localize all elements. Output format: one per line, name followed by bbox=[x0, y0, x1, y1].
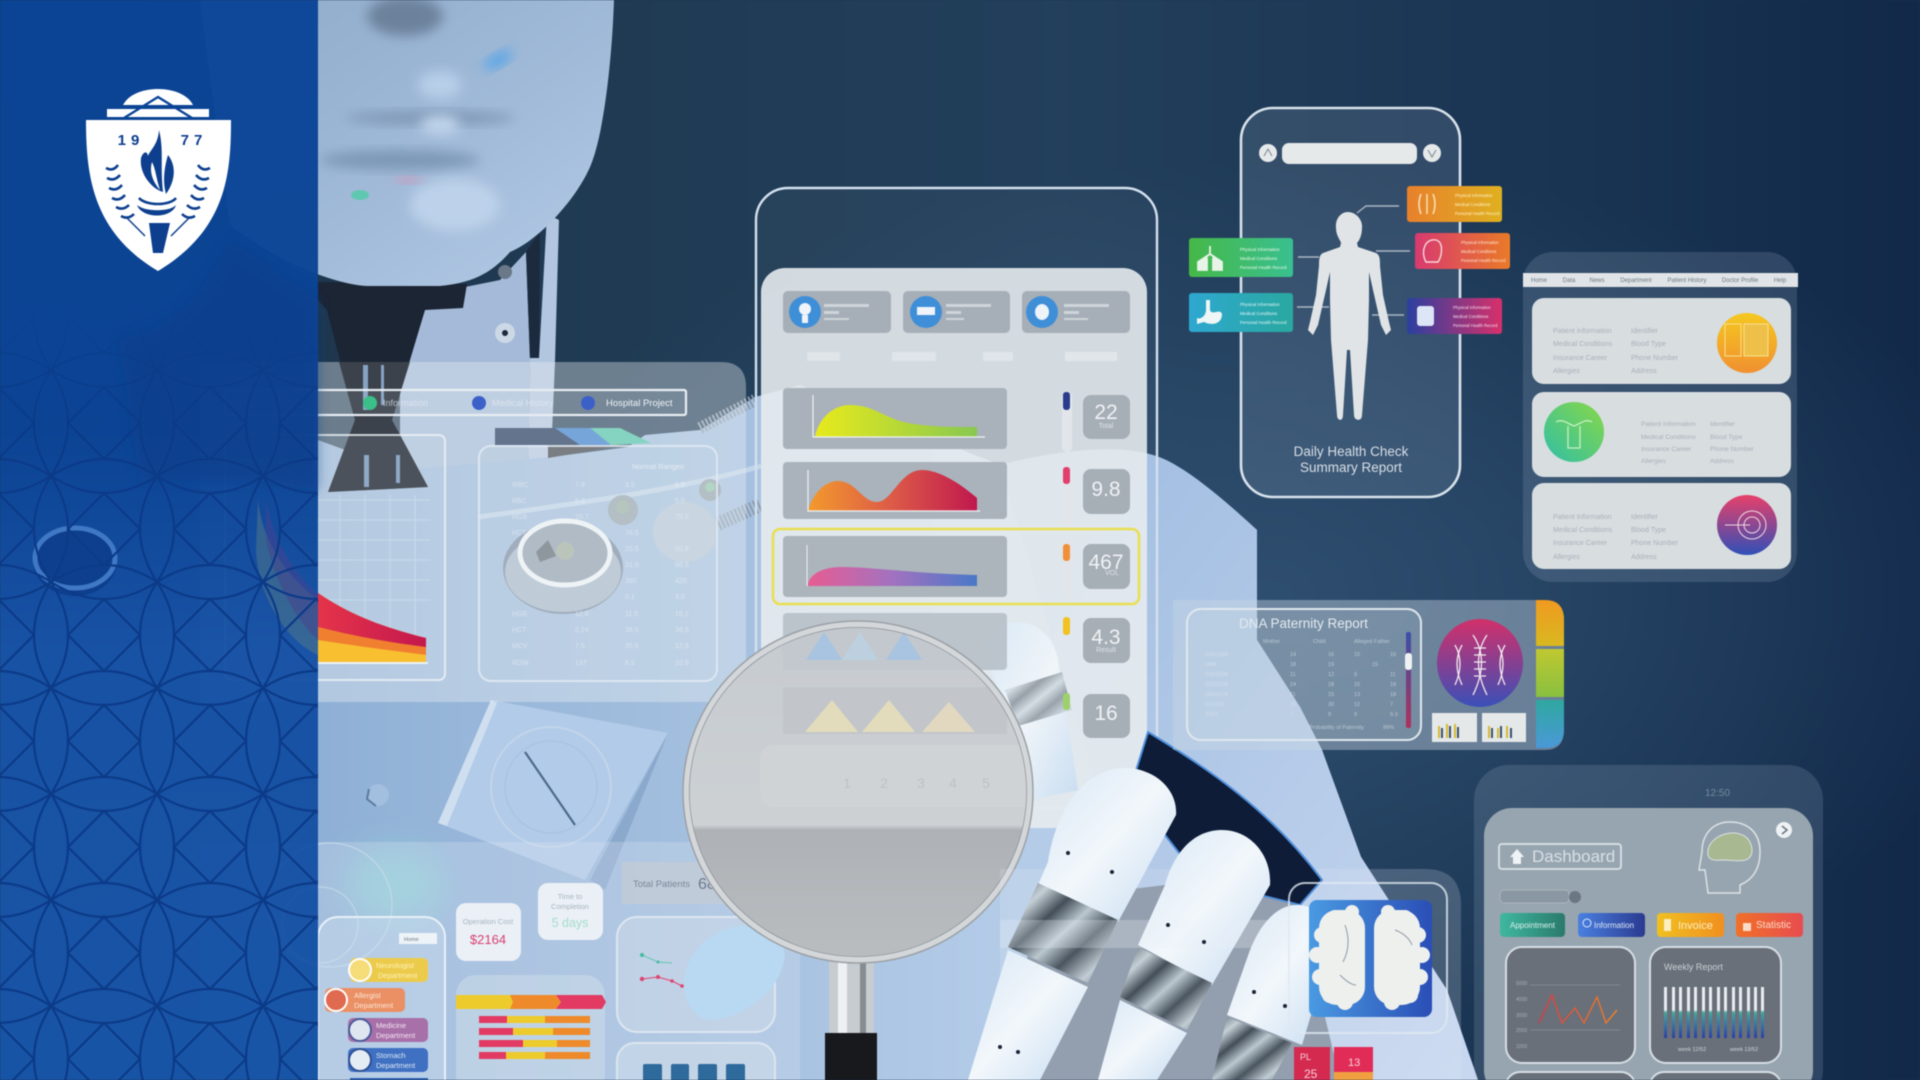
line chart bbox=[1506, 947, 1635, 1063]
report frame: 99% bbox=[1383, 725, 1394, 731]
weekly report chart: week 12/52 bbox=[1677, 1047, 1706, 1053]
table panel: HGB bbox=[512, 514, 528, 521]
tag: stomach bbox=[1189, 293, 1293, 332]
table panel: 7.9 bbox=[575, 482, 585, 489]
report frame: DNA Paternity Report bbox=[1239, 616, 1368, 631]
table panel: 36.5 bbox=[625, 627, 639, 634]
report frame: Child bbox=[1313, 639, 1326, 645]
dashboard card bbox=[1484, 808, 1813, 1080]
table panel: 5.5 bbox=[675, 498, 685, 505]
brain lobes bbox=[1309, 905, 1430, 1010]
blue overlay bbox=[0, 0, 318, 1080]
magnifier ring bbox=[683, 621, 1033, 963]
geometric pattern bbox=[0, 394, 318, 1080]
tag: spine: Physical Information bbox=[1455, 193, 1493, 198]
faint ring bbox=[268, 843, 392, 967]
line chart: 4000 bbox=[1516, 997, 1527, 1003]
record card 2: Medical Conditions bbox=[1641, 434, 1697, 441]
tag: intestine: Physical Information bbox=[1453, 305, 1491, 310]
red tiles bbox=[1294, 1047, 1373, 1080]
navigation bar: Home bbox=[1531, 278, 1548, 284]
record card 2 bbox=[1532, 392, 1791, 477]
neck seen through panel bbox=[328, 362, 428, 492]
chart row 1 bbox=[783, 388, 1007, 449]
logo year: 77 bbox=[181, 132, 207, 149]
color strip bbox=[1536, 600, 1564, 748]
gantt chart bbox=[456, 975, 606, 1080]
weekly report chart bbox=[1650, 947, 1781, 1063]
table panel: 3.5 bbox=[625, 482, 635, 489]
tab bar: Information bbox=[383, 398, 428, 408]
record card 2: Blood Type bbox=[1710, 434, 1743, 441]
tab bar: Medical History bbox=[492, 398, 554, 408]
record card 1: Patient Information bbox=[1553, 328, 1612, 335]
report frame: 15 bbox=[1354, 682, 1360, 688]
department phone bbox=[318, 917, 445, 1080]
tag: stomach: Personal Health Record bbox=[1240, 320, 1287, 325]
report frame: 16 bbox=[1390, 652, 1396, 658]
record card 3: Medical Conditions bbox=[1553, 527, 1613, 534]
area behind fingers bbox=[1000, 870, 1340, 1080]
department phone: Medicine bbox=[376, 1021, 406, 1030]
table panel: 3.0 bbox=[675, 594, 685, 601]
report frame: 15 bbox=[1328, 692, 1334, 698]
report frame: 9 bbox=[1354, 712, 1357, 718]
report frame: 29 bbox=[1290, 702, 1296, 708]
report frame: 7 bbox=[1290, 712, 1293, 718]
report frame: 11 bbox=[1390, 672, 1396, 678]
robot shoulder bbox=[1000, 449, 1478, 1080]
logo torch bbox=[137, 130, 176, 253]
panel: brain scan bbox=[1289, 883, 1447, 1080]
mini bar tiles bbox=[1432, 713, 1526, 742]
line chart: 2000 bbox=[1516, 1028, 1527, 1034]
department phone: Department bbox=[378, 971, 418, 980]
brain head icon bbox=[1699, 822, 1792, 893]
navigation bar: Doctor Profile bbox=[1722, 278, 1759, 284]
report frame: 12 bbox=[1328, 672, 1334, 678]
report frame: 14 bbox=[1290, 652, 1296, 658]
panel: patient records bbox=[1523, 252, 1798, 582]
report frame: Mother bbox=[1263, 639, 1280, 645]
report frame: 30 bbox=[1328, 702, 1334, 708]
logo year bbox=[118, 132, 207, 149]
record card 3: Address bbox=[1631, 554, 1657, 561]
navigation bar: Help bbox=[1774, 278, 1787, 284]
operation cost card bbox=[456, 903, 521, 961]
department phone: Home bbox=[404, 937, 419, 943]
record card 1: Phone Number bbox=[1631, 355, 1679, 362]
teal glow bbox=[345, 847, 445, 923]
table panel: HGB bbox=[512, 611, 528, 618]
report frame: Probability of Paternity bbox=[1309, 725, 1364, 731]
table panel: HCT bbox=[512, 530, 527, 537]
value readouts: VOL bbox=[1105, 570, 1119, 577]
record card 3: Insurance Career bbox=[1553, 540, 1608, 547]
report frame: 11 bbox=[1290, 672, 1296, 678]
icon button panel bbox=[617, 1043, 775, 1080]
report frame: 12 bbox=[1354, 702, 1360, 708]
navigation bar bbox=[1523, 273, 1798, 287]
left blue panel bbox=[0, 0, 318, 1080]
logo year: 19 bbox=[118, 132, 144, 149]
report frame: 18 bbox=[1390, 682, 1396, 688]
report frame: 16 bbox=[1328, 652, 1334, 658]
value readouts: 4.3 bbox=[1091, 626, 1121, 649]
table panel: 58.5 bbox=[675, 562, 689, 569]
status bar: 12:50 bbox=[1705, 788, 1730, 799]
table panel: HCT bbox=[512, 627, 527, 634]
table panel: 0.1 bbox=[625, 594, 635, 601]
finger 1 bbox=[968, 768, 1176, 1080]
panel: lower-left department app bbox=[200, 842, 800, 1080]
report frame: Alleged Father bbox=[1354, 639, 1390, 645]
robot neck bbox=[318, 282, 467, 492]
value readouts: 9.8 bbox=[1091, 478, 1121, 501]
value readouts: 22 bbox=[1094, 401, 1118, 424]
table panel: 0.24 bbox=[575, 627, 589, 634]
logo shield bbox=[86, 120, 231, 271]
table panel: 7.5 bbox=[575, 643, 585, 650]
magnifying glass bbox=[682, 620, 1034, 1080]
navigation bar: Department bbox=[1620, 278, 1652, 284]
finger 2 bbox=[1098, 830, 1270, 1080]
time to completion card: Completion bbox=[551, 902, 589, 911]
tag: head: Physical Information bbox=[1461, 240, 1499, 245]
value readouts: Result bbox=[1096, 647, 1116, 654]
line chart: 5000 bbox=[1516, 981, 1527, 987]
table panel: 137 bbox=[575, 660, 587, 667]
report frame: 15 bbox=[1354, 652, 1360, 658]
record card 2: Patient Information bbox=[1641, 421, 1696, 428]
neck colored tabs bbox=[495, 428, 651, 458]
panel: dashboard bbox=[1474, 765, 1823, 1080]
robot bbox=[200, 0, 1478, 1080]
record card 2: Phone Number bbox=[1710, 446, 1755, 453]
human body silhouette bbox=[1308, 212, 1391, 420]
tag: stomach: Physical Information bbox=[1240, 302, 1280, 307]
table panel: RBC bbox=[512, 498, 527, 505]
line chart: 3000 bbox=[1516, 1013, 1527, 1019]
record card 3: Phone Number bbox=[1631, 540, 1679, 547]
lens contents: 5 bbox=[982, 775, 990, 791]
robot neck plate bbox=[400, 214, 559, 480]
report frame: 18 bbox=[1390, 692, 1396, 698]
record card 2: Address bbox=[1710, 458, 1735, 465]
table panel: 420 bbox=[675, 578, 687, 585]
record card 3: Patient Information bbox=[1553, 514, 1612, 521]
panel: DNA paternity report bbox=[1173, 600, 1564, 750]
chart row 2 bbox=[783, 462, 1007, 519]
logo bbox=[86, 89, 231, 271]
logo laurels bbox=[106, 165, 210, 236]
table panel: WBC bbox=[512, 482, 528, 489]
record card 3 bbox=[1532, 483, 1791, 569]
table panel: 76.5 bbox=[625, 530, 639, 537]
operation cost card: Operation Cost bbox=[463, 917, 514, 926]
record card 3: Identifier bbox=[1631, 514, 1659, 521]
panel: vital signs phone bbox=[683, 188, 1160, 1080]
tag: head: Medical Conditions bbox=[1461, 249, 1496, 254]
category buttons: Appointment bbox=[1510, 921, 1556, 930]
red tiles: 13 bbox=[1348, 1057, 1360, 1069]
record card 1 bbox=[1532, 298, 1791, 384]
phone outline bbox=[1241, 108, 1460, 497]
highlight frame bbox=[773, 529, 1139, 604]
chart row 3 bbox=[783, 536, 1007, 597]
report frame: D2S1338 bbox=[1205, 682, 1228, 688]
report title: Summary Report bbox=[1300, 460, 1402, 475]
record card 1: Medical Conditions bbox=[1553, 341, 1613, 348]
total patients: Total Patients bbox=[633, 879, 690, 890]
department phone: Department bbox=[376, 1031, 416, 1040]
overlay ghost gear bbox=[33, 528, 117, 596]
value readouts: 16 bbox=[1094, 702, 1118, 725]
dashboard button: Dashboard bbox=[1532, 847, 1615, 866]
report frame: 18 bbox=[1328, 682, 1334, 688]
record card 2: Insurance Career bbox=[1641, 446, 1692, 453]
total patients bbox=[622, 862, 772, 904]
report frame: 7 bbox=[1390, 702, 1393, 708]
table panel: 12.9 bbox=[675, 643, 689, 650]
translucent strip bbox=[1000, 920, 1290, 948]
magnifier lens bbox=[688, 626, 1028, 958]
record card 1: Allergies bbox=[1553, 368, 1580, 375]
time to completion card bbox=[538, 883, 603, 940]
lens contents bbox=[804, 632, 989, 788]
panel: daily health check phone bbox=[1189, 108, 1510, 497]
connector lines bbox=[1297, 206, 1410, 315]
dark arm band bbox=[1130, 732, 1322, 905]
report title bbox=[1294, 444, 1409, 475]
weekly report chart: Weekly Report bbox=[1664, 962, 1723, 972]
record card 1: Identifier bbox=[1631, 328, 1659, 335]
tag: spine bbox=[1407, 186, 1502, 222]
tag: stomach: Medical Conditions bbox=[1240, 311, 1278, 316]
search field bbox=[1500, 890, 1581, 903]
tag: intestine bbox=[1407, 298, 1502, 334]
navigation bar: News bbox=[1589, 278, 1605, 284]
weekly report chart: week 13/52 bbox=[1729, 1047, 1758, 1053]
report frame: 18 bbox=[1290, 662, 1296, 668]
department phone: Department bbox=[376, 1061, 416, 1070]
table panel: 35.5 bbox=[625, 643, 639, 650]
chart row 4 bbox=[783, 613, 1007, 670]
top info cards bbox=[783, 291, 1130, 333]
robot thumb bbox=[684, 925, 785, 1020]
tag: spine: Personal Health Record bbox=[1455, 211, 1500, 216]
lower dashboard cards bbox=[1506, 1072, 1781, 1080]
dashboard button bbox=[1499, 844, 1621, 869]
value readouts: 467 bbox=[1088, 551, 1124, 574]
tag: lungs: Medical Conditions bbox=[1240, 256, 1278, 261]
inner card bbox=[761, 268, 1147, 828]
record card 2: Allergies bbox=[1641, 458, 1667, 465]
table panel: 6.5 bbox=[625, 660, 635, 667]
lens contents: 2 bbox=[880, 775, 888, 791]
tag: lungs: Physical Information bbox=[1240, 247, 1280, 252]
panel: brain scan backing bbox=[1000, 869, 1461, 1080]
report title: Daily Health Check bbox=[1294, 444, 1409, 459]
total patients: 6803 bbox=[698, 876, 734, 893]
report frame bbox=[1187, 609, 1421, 740]
tag: intestine: Personal Health Record bbox=[1453, 323, 1498, 328]
record card 2: Identifier bbox=[1710, 421, 1736, 428]
table panel: MCV bbox=[512, 643, 528, 650]
table panel: 9.5 bbox=[675, 482, 685, 489]
magnifier handle bbox=[825, 958, 877, 1080]
body curved highlight bbox=[478, 466, 761, 517]
overlay ghost rainbow chart bbox=[256, 500, 318, 655]
time to completion card: 5 days bbox=[552, 916, 588, 930]
tag: head bbox=[1415, 233, 1510, 269]
tag: intestine: Medical Conditions bbox=[1453, 314, 1488, 319]
report frame: 24 bbox=[1290, 682, 1296, 688]
tag: lungs bbox=[1189, 238, 1293, 277]
report frame: TH01 bbox=[1205, 712, 1218, 718]
category buttons: Invoice bbox=[1678, 920, 1713, 932]
table panel: Normal Ranges bbox=[632, 462, 684, 471]
table panel: 31.9 bbox=[625, 562, 639, 569]
chart panel: rainbow area bbox=[225, 435, 445, 680]
report frame: 15 bbox=[1372, 662, 1378, 668]
table panel: 50.9 bbox=[675, 546, 689, 553]
logo dome bbox=[123, 89, 193, 105]
robot finger behind panel bbox=[985, 622, 1078, 800]
scatter chart panel bbox=[617, 917, 775, 1032]
report frame: D16S539 bbox=[1205, 672, 1228, 678]
lens contents: 3 bbox=[917, 775, 925, 791]
report frame: 13 bbox=[1354, 692, 1360, 698]
navigation bar: Patient History bbox=[1667, 278, 1707, 284]
phone outline bbox=[756, 188, 1157, 808]
category buttons: Information bbox=[1594, 921, 1634, 930]
table panel: RDW bbox=[512, 660, 529, 667]
record card 3: Allergies bbox=[1553, 554, 1580, 561]
red tiles: PL bbox=[1300, 1052, 1311, 1062]
value readouts: Total bbox=[1099, 423, 1114, 430]
table panel: 11.5 bbox=[625, 611, 638, 618]
report frame: 19 bbox=[1328, 662, 1334, 668]
overlay ghost shadow bbox=[120, 240, 318, 490]
department phone: Neurologist bbox=[376, 961, 415, 970]
record card 1: Insurance Career bbox=[1553, 355, 1608, 362]
table panel: 25.5 bbox=[625, 546, 639, 553]
finger 3 bbox=[1212, 905, 1333, 1080]
mechanical gear bbox=[503, 400, 760, 614]
report frame: 11 bbox=[1290, 692, 1296, 698]
category buttons bbox=[1500, 913, 1803, 937]
report frame: vWA bbox=[1205, 662, 1217, 668]
report frame: 9 bbox=[1328, 712, 1331, 718]
lens contents: 4 bbox=[949, 775, 957, 791]
DNA icon bbox=[1437, 619, 1523, 707]
robot body bbox=[318, 385, 1478, 1080]
table panel: 16.1 bbox=[675, 611, 689, 618]
record card 1: Address bbox=[1631, 368, 1657, 375]
robot hand bbox=[968, 732, 1340, 1080]
tag: lungs: Personal Health Record bbox=[1240, 265, 1287, 270]
table panel: 75.5 bbox=[675, 514, 689, 521]
record card 3: Blood Type bbox=[1631, 527, 1666, 534]
report frame: 9 bbox=[1354, 672, 1357, 678]
department phone: Allergist bbox=[354, 991, 382, 1000]
tab bar bbox=[225, 390, 686, 415]
panel: translucent tab panel bbox=[200, 362, 746, 702]
table panel: 34.9 bbox=[675, 627, 689, 634]
value readouts bbox=[1062, 392, 1130, 738]
table panel: 12.8 bbox=[575, 611, 589, 618]
robot face bbox=[200, 0, 614, 286]
tag: head: Personal Health Record bbox=[1461, 258, 1506, 263]
table panel bbox=[479, 446, 717, 681]
tab bar: Hospital Project bbox=[606, 398, 673, 409]
table panel: 10.5 bbox=[675, 660, 689, 667]
search bar bbox=[1259, 143, 1441, 164]
line chart: 1000 bbox=[1516, 1044, 1527, 1050]
time to completion card: Time to bbox=[558, 892, 582, 901]
report frame: 9.3 bbox=[1390, 712, 1398, 718]
tag: spine: Medical Conditions bbox=[1455, 202, 1490, 207]
record card 1: Blood Type bbox=[1631, 341, 1666, 348]
navigation bar: Data bbox=[1563, 278, 1576, 284]
table panel: 380 bbox=[625, 578, 637, 585]
table panel: 5.3 bbox=[575, 498, 585, 505]
table panel: 10.7 bbox=[575, 514, 589, 521]
lens contents: 1 bbox=[843, 775, 851, 791]
operation cost card: $2164 bbox=[470, 932, 506, 947]
report frame: D8S1179 bbox=[1205, 692, 1228, 698]
report frame: D3S1358 bbox=[1205, 652, 1228, 658]
category buttons: Statistic bbox=[1756, 920, 1791, 931]
lower body plate bbox=[367, 700, 668, 890]
department phone: Stomach bbox=[376, 1051, 406, 1060]
report frame: D21S11 bbox=[1205, 702, 1224, 708]
faint column headers bbox=[807, 352, 1117, 361]
department phone: Department bbox=[354, 1001, 394, 1010]
